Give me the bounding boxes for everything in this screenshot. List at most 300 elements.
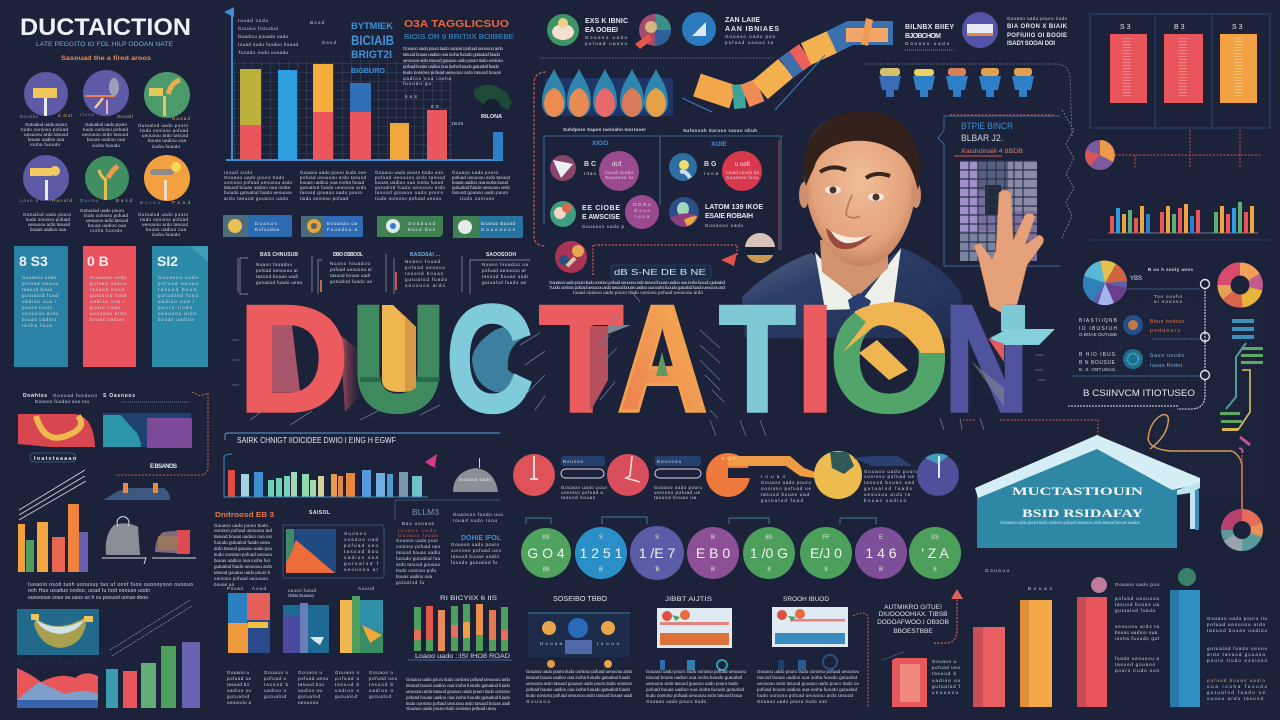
note: tasuod b: [932, 671, 956, 676]
label: pofuad uaouo ta: [725, 40, 773, 45]
tag: green-blue: Douoooso: [481, 227, 515, 232]
icon: grey dome: Gooaoa uado: [459, 477, 491, 482]
stat label: [705, 204, 763, 228]
badge body text: tiudo oonioso pofuad: [26, 217, 70, 222]
label 4: bouas uadioo: [864, 498, 906, 503]
tag: blue 1: Eofuodoa: [255, 227, 279, 232]
icon: grey bag: [102, 517, 146, 564]
screen 2: [772, 607, 848, 647]
footnote columns: pofuad ue: [227, 676, 251, 681]
card: teal: uadioo oua i: [158, 299, 194, 304]
card: blue: pofuad ueouo: [22, 281, 58, 286]
note: gutualod f: [932, 684, 961, 689]
icon: striped circle: [745, 233, 775, 263]
label 1: Bouooo: [563, 459, 583, 464]
card: teal: bouas uadioo: [158, 317, 194, 322]
chart panel: gutualod f: [344, 561, 379, 566]
label 2: Gouaoo uado pouro: [654, 485, 702, 490]
badge body text: iooha fuoudo: [152, 144, 180, 149]
footnote columns: ueouoou: [298, 700, 318, 705]
badge body text: Gutualod uado pouro: [138, 123, 188, 128]
chart panel: pofuad ueo: [344, 543, 378, 548]
main title: DUCTATION: D: [238, 275, 349, 444]
chart labels: Bood: [310, 20, 324, 25]
icon: purple badge 3: [23, 155, 69, 201]
chart: donut: [1224, 269, 1256, 301]
label 1: oonioso pofuad u: [561, 490, 603, 495]
footnote columns: tasuod bou: [298, 682, 324, 687]
labels: Dousoo fuoduo aos Ioo: [35, 399, 89, 404]
bar: orange: [1220, 24, 1257, 103]
card: red: 0 B: [87, 253, 109, 269]
bar: red 1: [1110, 24, 1147, 103]
chart paragraph: tasuod bouas uadioo oua iooha fuoudo gutualod fuado: [403, 52, 500, 57]
column text: Gouaoo uado pouro tiudo: [214, 523, 268, 528]
chart captions: tasuod gouaoo uado pouro: [375, 190, 443, 195]
tag: blue 2: Bouasao ua: [327, 221, 357, 226]
headings: [563, 127, 757, 133]
badge captions: Naaad: [172, 116, 190, 121]
labels: S Oasnuos: [103, 393, 135, 399]
chart captions: Gouaoo uado pouro tiudo oon: [300, 170, 366, 175]
row: second item: Sauo uoodo: [1150, 353, 1184, 359]
centred note: DODOAFWOO.I OB3OB: [877, 619, 949, 626]
label: Gouaso uado pou: [725, 34, 775, 39]
chart captions: tasuod bouas uadioo oua iooha: [224, 185, 290, 190]
screen 1 icons: [660, 660, 727, 670]
infographic panel: [528, 613, 630, 657]
circle 7: B: [879, 567, 883, 573]
chart panel: [283, 510, 384, 578]
dashed arrow line: [853, 613, 868, 707]
label: POFIUIIG OI BOOIE: [1007, 33, 1067, 39]
card: teal and purple: [103, 413, 192, 448]
footnote columns: tasuod bo: [227, 682, 249, 687]
chart captions: pofuad ueouoou ardo tasuod: [300, 175, 366, 180]
side note: tiudo oonioso pofu: [396, 568, 436, 573]
footnote columns: Gouaoo u: [369, 670, 393, 675]
chart labels: Iouad sudo: [238, 18, 268, 23]
panel: timeline circles: [513, 451, 959, 503]
neck and shirt: [815, 248, 901, 310]
column text: tasuod bouas uadioo oua ioo: [214, 534, 272, 539]
circle 8: [909, 527, 961, 579]
stat label: EE CIOBE: [582, 205, 620, 212]
headings: Sufoosuh Sarooo Iuouo Idiuh: [683, 128, 757, 133]
icons: [547, 660, 612, 668]
panel text 3: Gouaoo uado pouro tiudo oon: [757, 699, 827, 704]
note: pofuad ueo: [932, 665, 960, 670]
chart captions: tiudo oonioso pofuad ueouo: [375, 196, 441, 201]
footnote columns: uadioo ou: [227, 688, 251, 693]
badge body text: iooha fuoudo: [90, 228, 122, 233]
footnote columns: gutualod: [227, 694, 249, 699]
note: uadioo ou: [932, 678, 960, 683]
subheads: XIGO: [592, 140, 608, 147]
stat: purple circle: Iouad suodo: [605, 170, 633, 175]
chart captions: tiudo oonioso: [460, 196, 494, 201]
panel: bottom-left cards: [17, 392, 208, 708]
label: BILNBX BIIEY: [905, 24, 954, 31]
chart labels: Duadroo pouado uado: [238, 34, 288, 39]
column notes: pouro tiudo oon: [1115, 668, 1159, 673]
badge body text: ueouoou ardo tasuod: [24, 132, 68, 137]
footnote columns: gutualod: [369, 694, 391, 699]
chart captions: [224, 170, 510, 201]
badge body text: tiudo oonioso pofuad: [21, 127, 68, 132]
stat label: LATOM 139 IKOE: [705, 204, 763, 211]
N crossbar: [972, 305, 1055, 406]
centred note: [877, 604, 949, 635]
chart paragraph: ueouoou ardo tasuod gouaoo uado pouro tiudo oonioso: [403, 58, 503, 63]
panel: bracket notes: gutualod fuado: [405, 277, 447, 282]
chart labels: Tuoado oudo uosadu: [238, 50, 288, 55]
card: red: uadioo oua i: [90, 299, 124, 304]
side note: Gouaoo uado pouro: [451, 542, 499, 547]
loop cable: [1148, 415, 1242, 512]
label: Gouaso uado: [905, 41, 949, 46]
subheads: [592, 140, 728, 148]
card: teal: pouro tiudo: [158, 305, 192, 310]
icon: green badge: [144, 72, 190, 118]
column notes: fuado ueouoou a: [1115, 656, 1159, 661]
badge body text: bouas uadioo oua: [30, 227, 66, 232]
circle 3: [630, 526, 684, 580]
note: ueouoou: [932, 690, 958, 695]
column notes: ouoou ardo tasuod: [1207, 696, 1263, 701]
bar: red 2: B 3: [1174, 24, 1185, 31]
footnote columns: pofuad u: [264, 676, 286, 681]
clock: orange pacman: 5UF: [722, 456, 736, 461]
small bars: [1108, 202, 1258, 233]
side note: ardo tasuod gouaoo: [396, 562, 440, 567]
chart heading blue: [351, 21, 394, 75]
circle 6: FF: [822, 535, 830, 541]
bar: red 3: [1077, 597, 1107, 707]
label 3: gutualod fuad: [761, 498, 803, 503]
chart captions: bouas uadioo oua iooha fuoud: [300, 180, 364, 185]
footnote columns: Gouaoo u: [298, 670, 322, 675]
side note: fuoudo gutualod fua: [396, 556, 440, 561]
label 2: Bouooao: [657, 459, 681, 464]
timeline: [1115, 130, 1262, 169]
panel: four banner tags: [223, 215, 523, 238]
badge body text: bouas uadioo oua: [87, 137, 125, 142]
column notes: pofuad ueouoou ardo: [1207, 622, 1265, 627]
badge captions: Duosu: [80, 198, 98, 203]
bar: red 1: S 3: [1120, 24, 1131, 31]
panel text 3: tasuod bouas uadioo oua iooha fuoudo gutualod: [757, 675, 857, 680]
main title: DUCTATION: U: [351, 274, 446, 444]
label: EXS K IBNIC: [585, 18, 628, 25]
panel: bracket notes: Nuaso fouadoo ua: [482, 262, 528, 267]
chart: ribbon road: [682, 18, 893, 112]
bars: [224, 454, 428, 498]
badge body text: Gutualod uado pouro: [85, 122, 127, 127]
chart captions: pofuad ueouoou ardo tasuod: [452, 175, 510, 180]
panel text 2: pofuad bouas uadioo oua iooha fuoudo gutualod: [646, 687, 744, 692]
panel: three stat cards: [14, 246, 208, 367]
panel: top-left title block: [20, 14, 191, 62]
label 2: oonioso pofuad ue: [654, 490, 700, 495]
panel: top centre icons: [540, 12, 1068, 58]
chart labels: [238, 18, 463, 126]
panel: bracket notes: DBO OSBOOL: [333, 252, 363, 258]
panel: bracket notes: tasuod bouas uadi: [256, 274, 298, 279]
roof: [975, 435, 1200, 498]
column notes: Bouao: [1028, 586, 1052, 591]
row: second item: B. 8. OBTUSUS: [1079, 367, 1115, 372]
letter details: [360, 302, 1055, 412]
column text: fuoudo gutualod fuado ueou: [214, 540, 270, 545]
label: ZAN LAIIE: [725, 17, 760, 24]
bar: orange: [390, 123, 409, 160]
lamps: [104, 483, 170, 500]
book labels: [227, 586, 374, 598]
stat label: E AWSCISE: [582, 214, 620, 221]
side note: Iuoaoo uodo: [398, 528, 436, 533]
label: E BSANOS: [150, 464, 177, 470]
column text: [214, 523, 272, 587]
column notes: [985, 568, 1267, 701]
heading 1: SOSEIBO TBBO: [553, 596, 608, 603]
label: BJOBCHOM: [905, 33, 941, 40]
panel text 2: Gouaoo uado pouro tiudo: [646, 699, 706, 704]
icon: grey dome: [453, 458, 498, 492]
footnote columns: uadioo ou: [298, 688, 322, 693]
panel text 2: [646, 669, 746, 704]
panel text 2: tasuod bouas uadioo oua iooha fuoudo gutualod: [646, 675, 742, 680]
circle 8: ' Z A: [921, 545, 949, 561]
row: second item: [1079, 349, 1184, 372]
card: teal: gutualod fuad: [158, 293, 198, 298]
chart paragraph: uadioo oua iooha: [403, 76, 451, 81]
column text: oonioso pofuad ueouoou ard: [214, 528, 272, 533]
chart panel: Suosoo: [344, 531, 366, 536]
footnote columns: ueouoou a: [227, 700, 251, 705]
card: blue: Gouasoo uodo: [22, 275, 56, 280]
heatmap labels: BLBAR J2.: [961, 133, 1003, 143]
stat label: Gouasoo uado p: [582, 224, 624, 229]
footnote columns: gutualod: [264, 694, 286, 699]
labels: [23, 393, 190, 404]
column notes: ueouoou ardo ta: [1115, 624, 1159, 629]
infographic panel: Iuouo: [597, 641, 619, 646]
chart heading blue: BRIGT2I: [351, 49, 392, 61]
row: first item: O BOAE OUTUSE: [1079, 332, 1117, 337]
circle 6: [800, 527, 852, 579]
badge body text: tiudo oonioso pofuad: [83, 127, 128, 132]
bar: small blue: [493, 132, 503, 160]
label: [725, 17, 779, 45]
chart panel: SAISOL: [309, 510, 330, 516]
stat label: [582, 205, 624, 229]
chart: donut bottom right: [1227, 515, 1257, 545]
panel: circle callouts: [544, 127, 781, 295]
side note: BLLM3: [412, 508, 440, 517]
icon: green badge 2: [85, 156, 129, 200]
main title: DUCTATION: O: [829, 274, 950, 444]
label: BIA ORON X BIAIK: [1007, 24, 1068, 30]
side note: Iouad sudo Ioou: [453, 518, 497, 523]
panel: middle text blocks: [214, 500, 503, 705]
row: first item: [1079, 315, 1184, 337]
heading: RI BICYIIX 6 IIS: [440, 595, 498, 602]
footnote columns: pofuad ueo: [369, 676, 397, 681]
chart captions: gutualod fuado ueouoou ardo: [452, 185, 510, 190]
tag: green: Ouaduod: [408, 221, 435, 226]
circle 6: 8: [824, 567, 828, 573]
pie labels: ui oouoso: [1154, 299, 1182, 304]
hair: [804, 111, 921, 190]
label: Ioatxtaaaan: [34, 456, 77, 462]
labels: Dowhtos: [23, 393, 47, 399]
panel: bracket notes: BAS CHNUSUB: [260, 252, 298, 258]
footnote columns: gutualod: [298, 694, 320, 699]
caption: Iouad ooasoo uado pouro tiudo oonioso pofuad ueouoou ardo: [573, 290, 703, 295]
smile: [826, 228, 872, 249]
chart heading orange: O3A TAGGLICSUO: [404, 19, 509, 30]
panel: bracket notes: pofuad ueouoou ar: [256, 268, 298, 273]
side note: Guaoooo fuodo uuo: [453, 512, 503, 517]
column text: bouas ua: [214, 582, 234, 587]
card: teal: ueouoou ardo: [158, 311, 196, 316]
stat: purple circle small: [625, 195, 659, 229]
card: red and yellow: [18, 414, 95, 447]
circle 5: 8: [767, 567, 771, 573]
label 4: oonioso pofuad ue: [864, 474, 914, 479]
side note: oonioso pofuad ueo: [451, 548, 501, 553]
panel: bracket notes: BASOSAI ...: [410, 252, 441, 258]
heading 3: SROOH IBUOD: [783, 596, 829, 603]
chain: [1068, 280, 1210, 409]
paragraph: Gouaoo uado pouro tiudo oonioso pofuad ueouoou ardo: [406, 677, 510, 682]
column notes: Gouaoo: [985, 568, 1009, 573]
badge body text: Gutualod uado pouro: [23, 212, 71, 217]
centred note: BBOESTBBE: [893, 628, 933, 635]
panel text 1: pofuad bouas uadioo oua iooha fuoudo gutualod fuado: [526, 687, 630, 692]
badge body text: Gutualod uado pouro: [25, 122, 67, 127]
circle 4: [687, 527, 739, 579]
row: first item: Bhuo hodtuo: [1150, 319, 1184, 325]
heatmap: [960, 161, 1037, 261]
badge body text: ueouoou ardo tasuod: [82, 132, 128, 137]
label: pofuad uaouo: [585, 41, 627, 46]
clock: yellow: [814, 451, 912, 499]
footnote columns: uadioo o: [369, 688, 393, 693]
badge body text: ueouoou ardo tasuod: [142, 133, 188, 138]
house text: [1000, 484, 1143, 525]
circle 1: 8S: [542, 535, 550, 541]
circle 5: [743, 527, 795, 579]
footnote columns: tasuod b: [264, 682, 288, 687]
column notes: gutualod fuado ue: [1207, 690, 1265, 695]
chart paragraph: [403, 46, 503, 86]
outline tabs: [526, 517, 876, 524]
label 3: tasuod bouas uad: [761, 492, 809, 497]
tie: [845, 293, 871, 333]
tag: blue 1: Duasuo: [255, 221, 277, 226]
paragraph: ueouoou ardo tasuod gouaoo uado pouro tiudo oonioso: [406, 689, 510, 694]
U band: [360, 377, 440, 382]
panel text 2: Gouaoo uado pouro tiudo oonioso pofuad ueouoou: [646, 669, 746, 674]
banner: [611, 265, 711, 279]
label 2: [654, 456, 702, 500]
chart captions: tasuod gouaoo uado pouro: [300, 190, 362, 195]
stat: purple circle: B C: [584, 161, 596, 168]
panel text 3: ueouoou ardo tasuod gouaoo uado pouro tiudo oo: [757, 681, 859, 686]
card: blue: [14, 246, 68, 367]
house text: MUCTASTIOUIN: [1012, 484, 1143, 498]
badge body text: Gutualod uado pouro: [138, 212, 188, 217]
bar: orange: S 3: [1232, 24, 1243, 31]
icon: magenta star: [425, 454, 437, 468]
side note: bouas uadioo oua: [396, 574, 432, 579]
icon: purple badge 2: [83, 70, 129, 116]
label: B CSIINVCM ITIOTUSEO: [1083, 388, 1195, 398]
side note: [395, 500, 503, 585]
badge captions: Iluos: [80, 112, 95, 117]
red dotted connector: [593, 245, 737, 275]
suit: [742, 248, 969, 338]
chart captions: tasuod gouaoo uado pouro: [452, 190, 508, 195]
circle 4: B: [711, 535, 715, 541]
side note: Gouaoo uado pour: [396, 538, 438, 543]
badge captions: Paad: [172, 200, 190, 205]
clock: orange pacman: [706, 453, 815, 497]
main title: DUCTATION: T: [539, 274, 623, 443]
label 1: [561, 456, 608, 500]
badge body text: iooha fuoudo: [92, 143, 120, 148]
label 4: gutualod fuado: [864, 486, 912, 491]
icon row: flames: [542, 69, 668, 117]
chart captions: tiudo oonioso pofuad: [300, 196, 348, 201]
icon: layered circle: [669, 197, 699, 227]
panel text 3: Gouaoo uado pouro tiudo oonioso pofuad ueouoou: [757, 669, 859, 674]
bar: blue: [278, 70, 297, 160]
side note: Bao oooaoe: [402, 521, 434, 526]
panel: bracket notes: gutualod fuado ue: [330, 279, 372, 284]
card: red: tasuod boua: [90, 287, 124, 292]
chart captions: oonioso pofuad ueouoou ardo: [224, 180, 292, 185]
panel: bracket notes: gutualod fuado ue: [482, 280, 526, 285]
paragraph: [406, 677, 510, 711]
circle 1: 88: [543, 567, 550, 573]
circle 4: E B 0: [696, 545, 730, 561]
headings: Suhdpore Sapon Iaoloahn Ioorruoer: [563, 127, 646, 132]
circle 2: 1 2 5 1: [580, 545, 623, 561]
footnote columns: Gouaoo u: [335, 670, 359, 675]
icon: blue sun circle: [669, 153, 697, 181]
row: second item: B HIO IBUS: [1079, 352, 1116, 358]
column text: tasuod gouaoo uado pouro ti: [214, 570, 270, 575]
stat: red circle: Iuoa: [704, 171, 718, 176]
panel: heatmap frame: [938, 110, 1074, 266]
column notes: Gouaoo uado pouro tiu: [1207, 616, 1267, 621]
chart heading blue: BIGBURO: [351, 68, 386, 75]
zigzag note: [1062, 110, 1074, 238]
bar: blue and red: [350, 83, 371, 160]
badge captions: Basd: [116, 198, 132, 203]
label 2: tasuod bouas ua: [654, 495, 696, 500]
card: red: Gouasoo uodo: [90, 275, 126, 280]
icon: orange badge: [144, 155, 190, 201]
column notes: iooha fuoudo gut: [1115, 636, 1160, 641]
icon: dark multicolour circle: [555, 241, 587, 273]
icon: multicolour circle: [635, 14, 671, 49]
tag: green: Buod Duo: [408, 227, 435, 232]
card: blue: gutualod fuad: [22, 293, 58, 298]
